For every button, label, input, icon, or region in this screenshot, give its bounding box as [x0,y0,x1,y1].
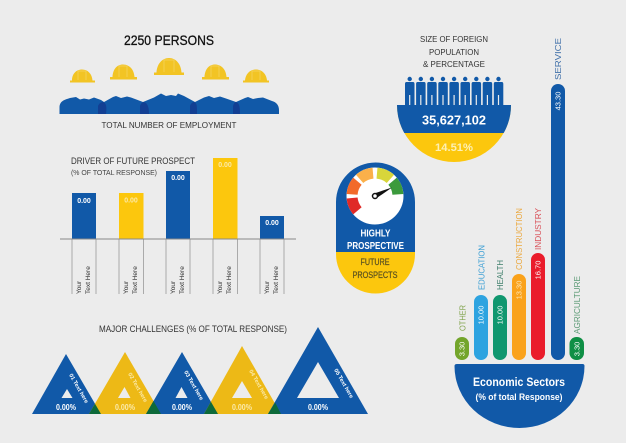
chart: economic sectors bars: AGRICULTURE [572,276,582,334]
triangle chart: major challenges [32,327,368,414]
semicircle: foreign population figures: 35,627,102 [422,112,486,128]
bar chart: driver of future prospect: Text Here [273,266,280,294]
bar chart: driver of future prospect: Text Here [132,266,139,294]
panel: future prospects gauge: HIGHLY [360,228,391,240]
heading: major challenges: MAJOR CHALLENGES (% OF TOTAL RESPONSE) [99,324,287,334]
triangle chart: major challenges: 03 Text here [182,370,204,402]
triangle chart: major challenges: 01 Text here [67,373,89,405]
chart: economic sectors bars [455,38,584,360]
heading: size of foreign population [420,34,488,69]
icon: row of people [405,77,503,106]
panel: economic sectors bowl: (% of total Response) [476,392,563,402]
heading: driver of future prospect: (% OF TOTAL RESPONSE) [71,168,157,177]
bar chart: driver of future prospect: Your [123,280,130,294]
panel: future prospects gauge: FUTURE [360,257,390,267]
bar chart: driver of future prospect: Your [170,280,177,294]
heading: driver of future prospect [71,156,196,177]
semicircle: foreign population figures: 14.51% [435,142,473,154]
chart: economic sectors bars: SERVICE [553,38,563,80]
gauge arcs [352,173,398,211]
bar chart: driver of future prospect [60,158,296,294]
chart: economic sectors bars: CONSTRUCTION [514,208,524,270]
semicircle: foreign population figures [397,105,511,162]
chart: economic sectors bars: 3.30 [572,342,582,356]
triangle chart: major challenges: 0.00% [308,403,328,412]
triangle chart: major challenges: 05 Text here [332,368,354,400]
panel: future prospects gauge: PROSPECTS [352,270,398,280]
chart: economic sectors bars: 3.30 [458,342,466,356]
heading: size of foreign population: & PERCENTAGE [423,59,485,69]
triangle chart: major challenges: 04 Text here [247,369,269,401]
icon: yellow helmets [70,58,269,82]
bar chart: driver of future prospect: Text Here [179,266,186,294]
chart: economic sectors bars: 16.70 [534,261,542,279]
title: 2250 persons: 2250 PERSONS [124,32,214,48]
icon: row of worker shoulders [60,94,279,114]
bar chart: driver of future prospect: Your [76,280,83,294]
bar chart: driver of future prospect: Text Here [226,266,233,294]
heading: size of foreign population: SIZE OF FOREIGN [420,34,488,44]
bar chart: driver of future prospect: 0.00 [218,162,232,169]
heading: size of foreign population: POPULATION [429,47,479,57]
triangle chart: major challenges: 0.00% [56,403,76,412]
chart: economic sectors bars: 13.30 [514,281,524,299]
bar chart: driver of future prospect: 0.00 [124,198,138,204]
bar chart: driver of future prospect: Your [264,280,271,294]
heading: driver of future prospect: DRIVER OF FUTURE PROSPECT [71,156,196,166]
bar chart: driver of future prospect: Text Here [85,266,92,294]
bar chart: driver of future prospect: 0.00 [77,198,91,205]
triangle chart: major challenges: 0.00% [232,403,252,412]
panel: economic sectors bowl [454,364,584,428]
chart: economic sectors bars: 43.30 [554,92,562,110]
bar chart: driver of future prospect: Your [217,280,224,294]
bar chart: driver of future prospect: 0.00 [171,175,185,182]
panel: future prospects gauge: PROSPECTIVE [347,241,404,252]
triangle chart: major challenges: 0.00% [115,403,135,412]
bar chart: driver of future prospect: 0.00 [265,220,279,227]
chart: economic sectors bars: 10.00 [496,306,504,324]
panel: future prospects gauge [336,162,415,294]
panel: economic sectors bowl: Economic Sectors [473,377,565,389]
triangle chart: major challenges: 0.00% [172,403,192,412]
triangle chart: major challenges: 02 Text here [126,372,148,404]
gauge needle [372,188,392,198]
chart: economic sectors bars: INDUSTRY [533,208,543,250]
chart: economic sectors bars: 10.00 [476,306,486,324]
label: total number of employment: TOTAL NUMBER OF EMPLOYMENT [102,120,236,130]
chart: economic sectors bars: HEALTH [495,260,505,290]
chart: economic sectors bars: OTHER [458,305,468,331]
chart: economic sectors bars: EDUCATION [476,245,486,290]
